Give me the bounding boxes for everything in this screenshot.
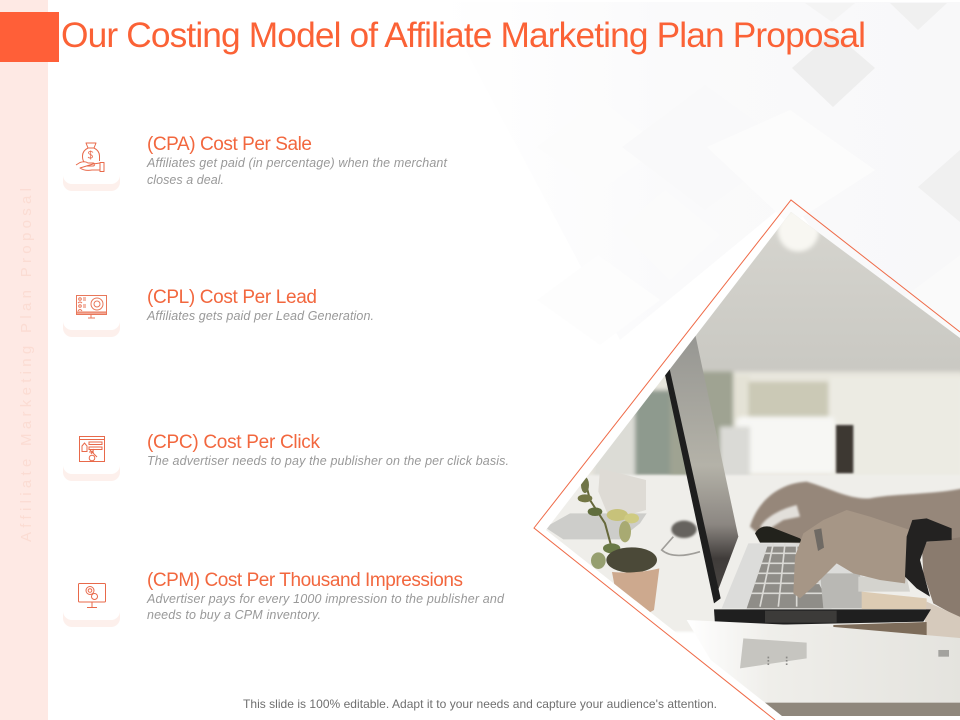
title accent block	[0, 12, 59, 62]
footer note: This slide is 100% editable. Adapt it to your needs and capture your audience's attention.	[243, 697, 717, 711]
description: CPC: The advertiser needs to pay the publisher on the per click basis.	[147, 454, 509, 468]
desk	[523, 475, 960, 632]
laptop front edge	[714, 609, 931, 625]
desk edge bottom	[763, 703, 960, 716]
item: CPA cost per sale	[63, 130, 448, 191]
strip of light desk	[858, 577, 910, 592]
front forearm	[922, 537, 960, 620]
desk mouse	[671, 521, 697, 538]
blurred background room	[588, 370, 960, 476]
laptop base	[722, 543, 863, 608]
ceiling lamp glow	[778, 208, 819, 252]
plant	[578, 477, 657, 573]
papers in foreground	[687, 620, 960, 703]
icon card: CPA	[63, 130, 120, 191]
description: CPM: Advertiser pays for every 1000 impression to the publisher and	[146, 592, 505, 606]
laptop bezel	[664, 366, 721, 603]
wood beneath laptop	[833, 622, 927, 636]
icon card: CPM	[63, 566, 120, 627]
photo frame outline	[534, 200, 960, 720]
watch	[905, 518, 952, 597]
left sidebar	[0, 0, 48, 720]
photo: laptop and hands in diamond frame	[523, 190, 960, 716]
description: CPL: Affiliates gets paid per Lead Generation.	[146, 309, 374, 323]
heading: CPC: (CPC) Cost Per Click	[147, 432, 320, 453]
notebook on desk	[545, 513, 647, 539]
card on desk	[598, 474, 646, 520]
heading: CPA: (CPA) Cost Per Sale	[147, 134, 312, 155]
heading: CPM: (CPM) Cost Per Thousand Impressions	[147, 570, 463, 591]
mouse under rear hand	[755, 526, 803, 543]
silver deck right of keyboard	[820, 573, 863, 608]
description: CPM: needs to buy a CPM inventory.	[147, 608, 321, 622]
icon card: CPL	[63, 276, 120, 337]
rear arm and hand	[750, 482, 960, 543]
icon: monitor with target and click	[78, 584, 106, 608]
item: CPL cost per lead	[63, 276, 374, 337]
icon: money bag in hand	[76, 143, 104, 172]
sidebar vertical label: Affiliate Marketing Plan Proposal	[18, 188, 35, 542]
wall	[664, 212, 960, 376]
icon: monitor with chart	[76, 296, 106, 318]
wood surface	[862, 592, 927, 609]
description: CPA: closes a deal.	[147, 173, 224, 187]
icon card: CPC	[63, 420, 120, 481]
front hand	[793, 510, 910, 598]
item: CPC cost per click	[63, 420, 509, 481]
heading: CPL: (CPL) Cost Per Lead	[147, 287, 317, 308]
title: Our Costing Model of Affiliate Marketing Plan Proposal	[61, 16, 866, 55]
keyboard	[747, 547, 832, 608]
dark object behind white block	[836, 425, 853, 473]
description: CPA: Affiliates get paid (in percentage) when the merchant	[146, 156, 448, 170]
plant pot	[612, 568, 659, 615]
icon: browser window with tag and cursor	[80, 436, 104, 462]
ring	[814, 528, 824, 551]
desk cable	[662, 537, 700, 555]
laptop screen	[664, 333, 738, 598]
desk behind forearm	[923, 602, 960, 640]
item: CPM cost per thousand impressions	[63, 566, 505, 627]
